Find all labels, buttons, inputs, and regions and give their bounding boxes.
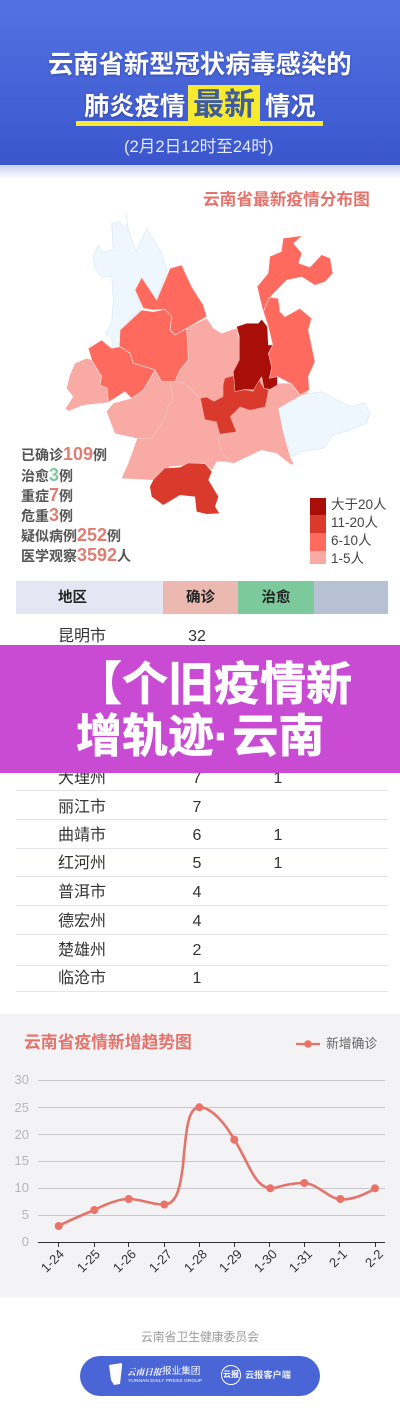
legend swatch: 6-10 <box>310 533 326 551</box>
x axis labels: 1-29 <box>216 1246 245 1275</box>
stat: confirmed: 已确诊109例 <box>21 444 107 464</box>
region: northwest, no cases <box>93 213 167 350</box>
row: Qujing cured: 1 <box>274 827 282 844</box>
table <box>16 581 388 992</box>
footer logo pill <box>80 1356 320 1396</box>
x axis labels: 2-1 <box>326 1246 350 1270</box>
table header: cured: 治愈 <box>262 590 290 606</box>
title line 1: 云南省新型冠状病毒感染的 <box>48 51 352 79</box>
x axis labels <box>38 1246 386 1275</box>
region: Zhaotong, 6-10 <box>257 236 333 312</box>
grid lines <box>38 1080 385 1216</box>
y axis labels: 25 <box>15 1100 29 1115</box>
stats list <box>21 444 131 565</box>
highlighted word: 最新 <box>193 87 255 122</box>
icon: round app logo: 云报 <box>223 1370 239 1379</box>
x axis labels: 1-25 <box>74 1246 103 1275</box>
region: Wenshan, no cases <box>277 392 370 457</box>
region: south and centre, 1-5 <box>107 318 308 480</box>
stat: cured: 治愈3例 <box>21 465 73 485</box>
footer source text: 云南省卫生健康委员会 <box>141 1330 259 1344</box>
region: Dehong, 1-5 <box>66 358 108 411</box>
legend label: over 20: 大于20人 <box>331 497 387 512</box>
x axis labels: 1-27 <box>146 1246 175 1275</box>
x axis <box>38 1242 385 1247</box>
press group English name: YUNNAN DAILY PRESS GROUP <box>128 1379 202 1384</box>
table header: blank column <box>314 581 388 614</box>
row: Lincang confirmed: 1 <box>193 970 201 987</box>
y axis labels: 5 <box>22 1207 29 1222</box>
x axis labels: 1-31 <box>286 1246 315 1275</box>
region: Lijiang, 6-10 <box>135 265 207 335</box>
row: Dali: 大理州 <box>58 770 106 787</box>
row: Kunming confirmed: 32 <box>188 628 206 645</box>
y axis labels: 10 <box>15 1180 29 1195</box>
row: Dehong confirmed: 4 <box>193 913 201 930</box>
icon: newspaper cup logo <box>109 1363 122 1385</box>
trend line <box>59 1107 375 1226</box>
row: Dali cured: 1 <box>274 770 282 787</box>
region borders inside light area <box>137 382 233 463</box>
y axis labels: 30 <box>15 1072 29 1087</box>
row: Kunming: 昆明市 <box>58 628 106 645</box>
region: Kunming, over 20 <box>233 319 277 392</box>
highlight box <box>188 85 260 125</box>
x axis labels: 1-28 <box>181 1246 210 1275</box>
x axis labels: 2-2 <box>362 1246 386 1270</box>
y axis labels <box>15 1072 29 1249</box>
row: Lincang: 临沧市 <box>58 970 106 987</box>
row: Qujing: 曲靖市 <box>58 827 106 844</box>
title line 2 left: 肺炎疫情 <box>84 93 185 121</box>
chart legend marker <box>296 1040 320 1048</box>
header gradient background <box>0 0 400 165</box>
calligraphy newspaper name: 云南日报 <box>127 1367 161 1377</box>
chart heading: 云南省疫情新增趋势图 <box>24 1033 192 1052</box>
row: Dehong: 德宏州 <box>58 913 106 930</box>
row: Lijiang confirmed: 7 <box>193 799 201 816</box>
banner text line 2: 增轨迹·云南 <box>76 710 324 762</box>
row: Chuxiong confirmed: 2 <box>193 942 201 959</box>
row: Qujing confirmed: 6 <box>193 827 201 844</box>
legend label: 11-20: 11-20人 <box>331 515 378 530</box>
row: Chuxiong: 楚雄州 <box>58 942 106 959</box>
legend label: 6-10: 6-10人 <box>331 533 372 548</box>
x axis labels: 1-30 <box>251 1246 280 1275</box>
table header: region: 地区 <box>58 590 87 606</box>
table header: region <box>16 581 163 614</box>
region: Baoshan, 6-10 <box>88 340 155 402</box>
chart legend label: 新增确诊 <box>326 1036 377 1051</box>
table header: confirmed: 确诊 <box>186 590 215 606</box>
map heading: 云南省最新疫情分布图 <box>203 190 370 209</box>
region: Yuxi, 11-20 <box>201 376 268 434</box>
trend chart panel <box>0 1014 400 1297</box>
stat: observation: 医学观察3592人 <box>21 545 131 565</box>
table header: cured <box>238 581 314 614</box>
legend swatch: over 20 <box>310 498 326 515</box>
row: Pu'er: 普洱市 <box>58 884 106 901</box>
stat: critical: 危重3例 <box>21 505 73 525</box>
legend label: 1-5: 1-5人 <box>331 551 364 566</box>
y axis labels: 0 <box>22 1234 29 1249</box>
yellow underline <box>76 121 323 126</box>
row: Dali confirmed: 7 <box>193 770 201 787</box>
region: Qujing, 6-10 <box>263 297 315 395</box>
title line 2 right: 情况 <box>265 93 316 121</box>
subtitle date: (2月2日12时至24时) <box>124 137 273 156</box>
y axis labels: 15 <box>15 1153 29 1168</box>
legend swatch: 1-5 <box>310 551 326 564</box>
data points <box>55 1103 379 1230</box>
row: Honghe cured: 1 <box>274 855 282 872</box>
y axis labels: 20 <box>15 1127 29 1142</box>
map legend <box>310 497 387 566</box>
region: Dali, 6-10 <box>119 309 188 382</box>
stat: severe: 重症7例 <box>21 485 73 505</box>
icon: round app logo <box>221 1365 241 1385</box>
press group name: 报业集团 <box>162 1366 200 1377</box>
row: Pu'er confirmed: 4 <box>193 884 201 901</box>
header banner <box>0 0 400 177</box>
row: Honghe confirmed: 5 <box>193 855 201 872</box>
row: Lijiang: 丽江市 <box>58 799 106 816</box>
purple overlay banner <box>0 645 400 773</box>
banner text line 1: 【个旧疫情新 <box>76 658 352 710</box>
legend swatch: 11-20 <box>310 515 326 533</box>
table header: confirmed <box>163 581 238 614</box>
stat: suspected: 疑似病例252例 <box>21 525 121 545</box>
row: Honghe: 红河州 <box>58 855 106 872</box>
region: Xishuangbanna, 11-20 <box>150 463 219 514</box>
x axis labels: 1-24 <box>38 1246 67 1275</box>
header shadow <box>0 165 400 179</box>
app name: 云报客户端 <box>245 1370 291 1380</box>
x axis labels: 1-26 <box>110 1246 139 1275</box>
